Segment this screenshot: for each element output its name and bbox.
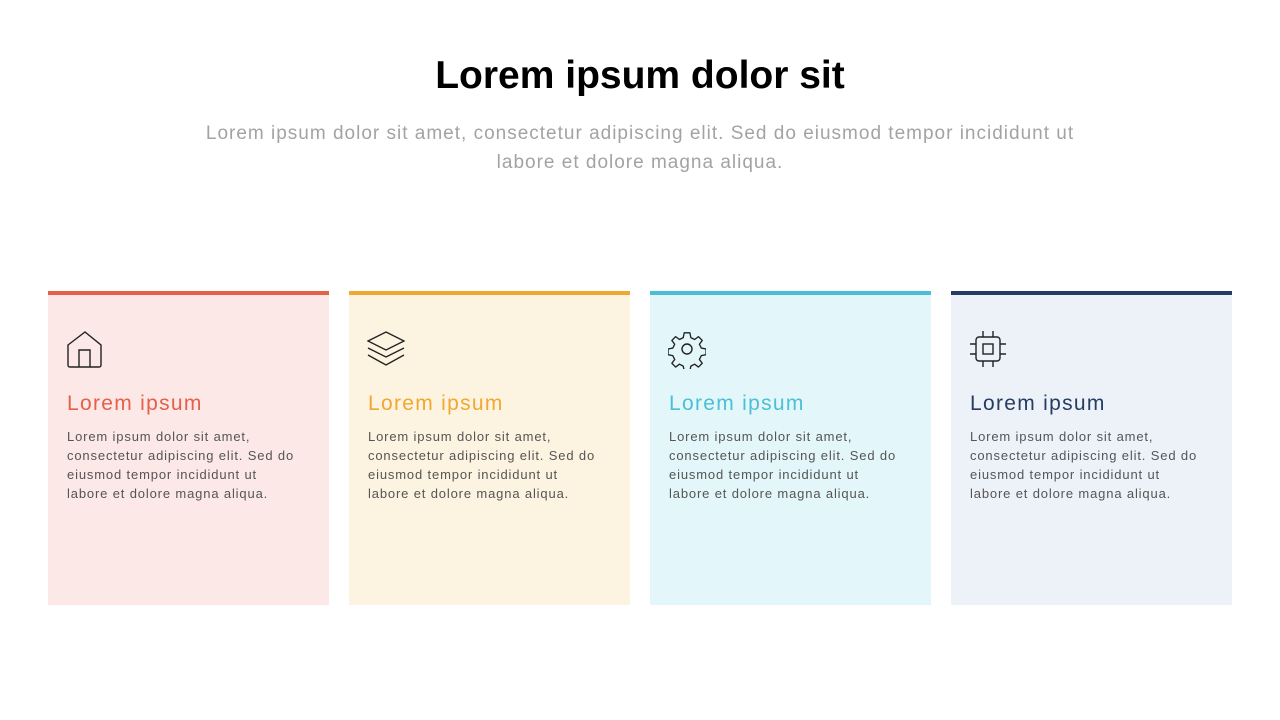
panel: card 2 <box>349 291 630 605</box>
text <box>669 429 896 501</box>
text: labore et dolore magna aliqua. <box>669 486 870 501</box>
heading: Lorem ipsum <box>970 392 1106 415</box>
icon: chip <box>970 331 1006 367</box>
text: eiusmod tempor incididunt ut <box>669 467 859 482</box>
text: labore et dolore magna aliqua. <box>67 486 268 501</box>
subtitle: labore et dolore magna aliqua. <box>497 152 783 173</box>
heading: Lorem ipsum <box>669 392 805 415</box>
subtitle <box>206 123 1074 173</box>
text <box>368 429 595 501</box>
text: labore et dolore magna aliqua. <box>970 486 1171 501</box>
text: eiusmod tempor incididunt ut <box>368 467 558 482</box>
text <box>67 429 294 501</box>
text <box>970 429 1197 501</box>
panel: card 4 <box>951 291 1232 605</box>
text: consectetur adipiscing elit. Sed do <box>669 448 896 463</box>
text: eiusmod tempor incididunt ut <box>67 467 257 482</box>
title: Lorem ipsum dolor sit <box>435 54 845 97</box>
text: Lorem ipsum dolor sit amet, <box>67 429 250 444</box>
icon: layers <box>367 331 405 366</box>
panel: card 3 <box>650 291 931 605</box>
text: eiusmod tempor incididunt ut <box>970 467 1160 482</box>
text: Lorem ipsum dolor sit amet, <box>669 429 852 444</box>
text: consectetur adipiscing elit. Sed do <box>970 448 1197 463</box>
icon: gear <box>668 332 706 369</box>
text: Lorem ipsum dolor sit amet, <box>970 429 1153 444</box>
icon: house <box>67 331 102 368</box>
text: Lorem ipsum dolor sit amet, <box>368 429 551 444</box>
text: consectetur adipiscing elit. Sed do <box>368 448 595 463</box>
text: consectetur adipiscing elit. Sed do <box>67 448 294 463</box>
panel: card 1 <box>48 291 329 605</box>
subtitle: Lorem ipsum dolor sit amet, consectetur adipiscing elit. Sed do eiusmod tempor incididunt ut <box>206 123 1074 144</box>
heading: Lorem ipsum <box>67 392 203 415</box>
text: labore et dolore magna aliqua. <box>368 486 569 501</box>
heading: Lorem ipsum <box>368 392 504 415</box>
